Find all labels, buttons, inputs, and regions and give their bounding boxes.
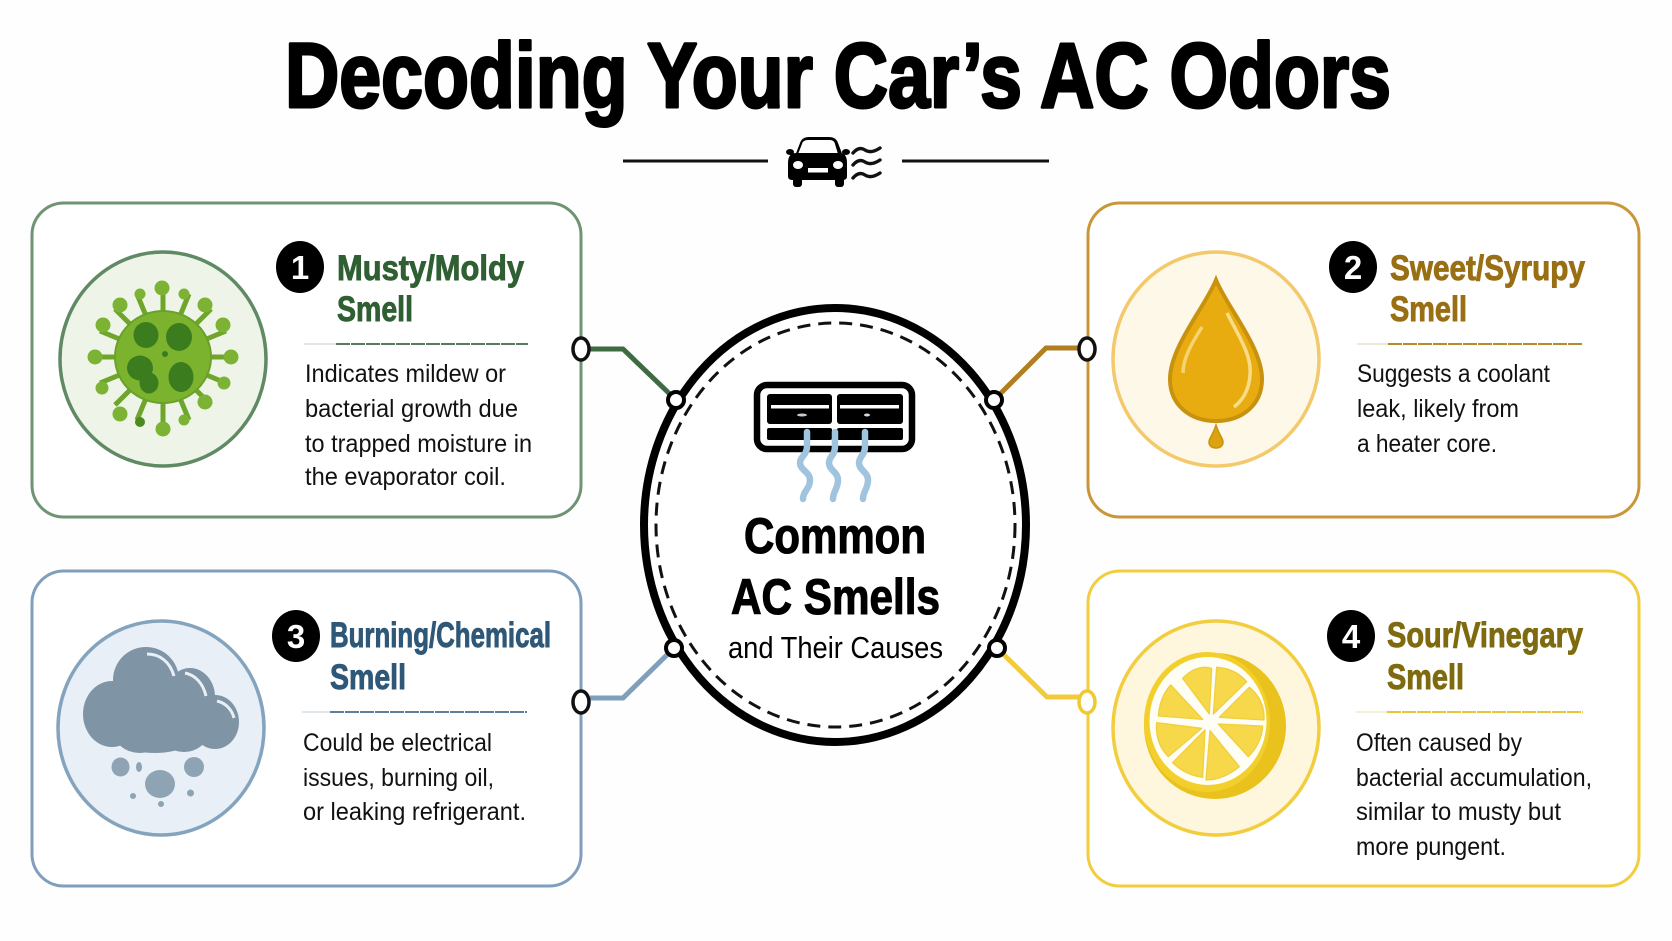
panel connector nodes [573, 338, 1095, 713]
divider [1356, 711, 1583, 713]
title ornament: lines and car icon [623, 137, 1049, 187]
icon: smoke cloud [58, 621, 264, 835]
divider [304, 343, 528, 345]
body text [1357, 360, 1550, 458]
hub text: Common [744, 508, 926, 564]
heading: sweet/syrupy smell: Sweet/Syrupy [1390, 248, 1585, 288]
connector: gold [994, 348, 1080, 400]
number badge 4: 4 [1342, 618, 1361, 655]
panel: burning/chemical smell [32, 571, 581, 886]
hub nodes [666, 392, 1005, 656]
body text: Suggests a coolant [1357, 360, 1550, 388]
body text: more pungent. [1356, 833, 1506, 861]
hub text: AC Smells [731, 569, 940, 625]
body text: Indicates mildew or [305, 360, 506, 388]
central hub: common AC smells [644, 308, 1026, 742]
body text: bacterial growth due [305, 395, 518, 423]
body text: or leaking refrigerant. [303, 798, 526, 826]
body text: to trapped moisture in [305, 430, 532, 458]
number badge 2: 2 [1344, 249, 1362, 286]
body text: Often caused by [1356, 729, 1522, 757]
body text: similar to musty but [1356, 798, 1561, 826]
divider [302, 711, 527, 713]
heading: musty/moldy smell: Musty/Moldy [337, 248, 524, 288]
body text [1356, 729, 1592, 861]
title: Decoding Your Car’s AC Odors [285, 25, 1391, 127]
icon: odor waves [853, 148, 880, 178]
hub text [728, 508, 943, 665]
body text: leak, likely from [1357, 395, 1519, 423]
icon: lemon slice [1113, 621, 1319, 835]
connector: green [590, 349, 676, 400]
body text: Could be electrical [303, 729, 492, 757]
divider [1357, 343, 1583, 345]
icon: coolant drop [1113, 252, 1319, 466]
heading: sour/vinegary smell [1387, 615, 1583, 697]
body text: bacterial accumulation, [1356, 764, 1592, 792]
body text: issues, burning oil, [303, 764, 494, 792]
number badge 1: 1 [291, 249, 309, 286]
body text [305, 360, 532, 491]
heading: sweet/syrupy smell: Smell [1390, 289, 1467, 329]
heading: burning/chemical smell: Burning/Chemical [330, 615, 551, 655]
panel: musty/moldy smell [32, 203, 581, 517]
icon: AC vent [757, 385, 912, 499]
heading: burning/chemical smell: Smell [330, 657, 406, 697]
panel: sweet/syrupy smell [1088, 203, 1639, 517]
panel: sour/vinegary smell [1088, 571, 1639, 886]
number badge 3 [272, 610, 320, 662]
heading: sour/vinegary smell: Sour/Vinegary [1387, 615, 1583, 655]
number badge 3: 3 [287, 618, 305, 655]
body text: a heater core. [1357, 430, 1497, 458]
heading: burning/chemical smell [330, 615, 551, 697]
number badge 2 [1329, 241, 1377, 293]
connector: blue [590, 648, 674, 698]
body text: the evaporator coil. [305, 463, 506, 491]
connector: yellow [997, 648, 1080, 697]
body text [303, 729, 526, 826]
number badge 1 [276, 241, 324, 293]
icon: car [786, 137, 850, 187]
heading: sweet/syrupy smell [1390, 248, 1585, 329]
number badge 4 [1327, 610, 1375, 662]
icon: mold virus [60, 252, 266, 466]
heading: musty/moldy smell: Smell [337, 289, 413, 329]
heading: musty/moldy smell [337, 248, 524, 329]
hub text: and Their Causes [728, 630, 943, 665]
heading: sour/vinegary smell: Smell [1387, 657, 1464, 697]
